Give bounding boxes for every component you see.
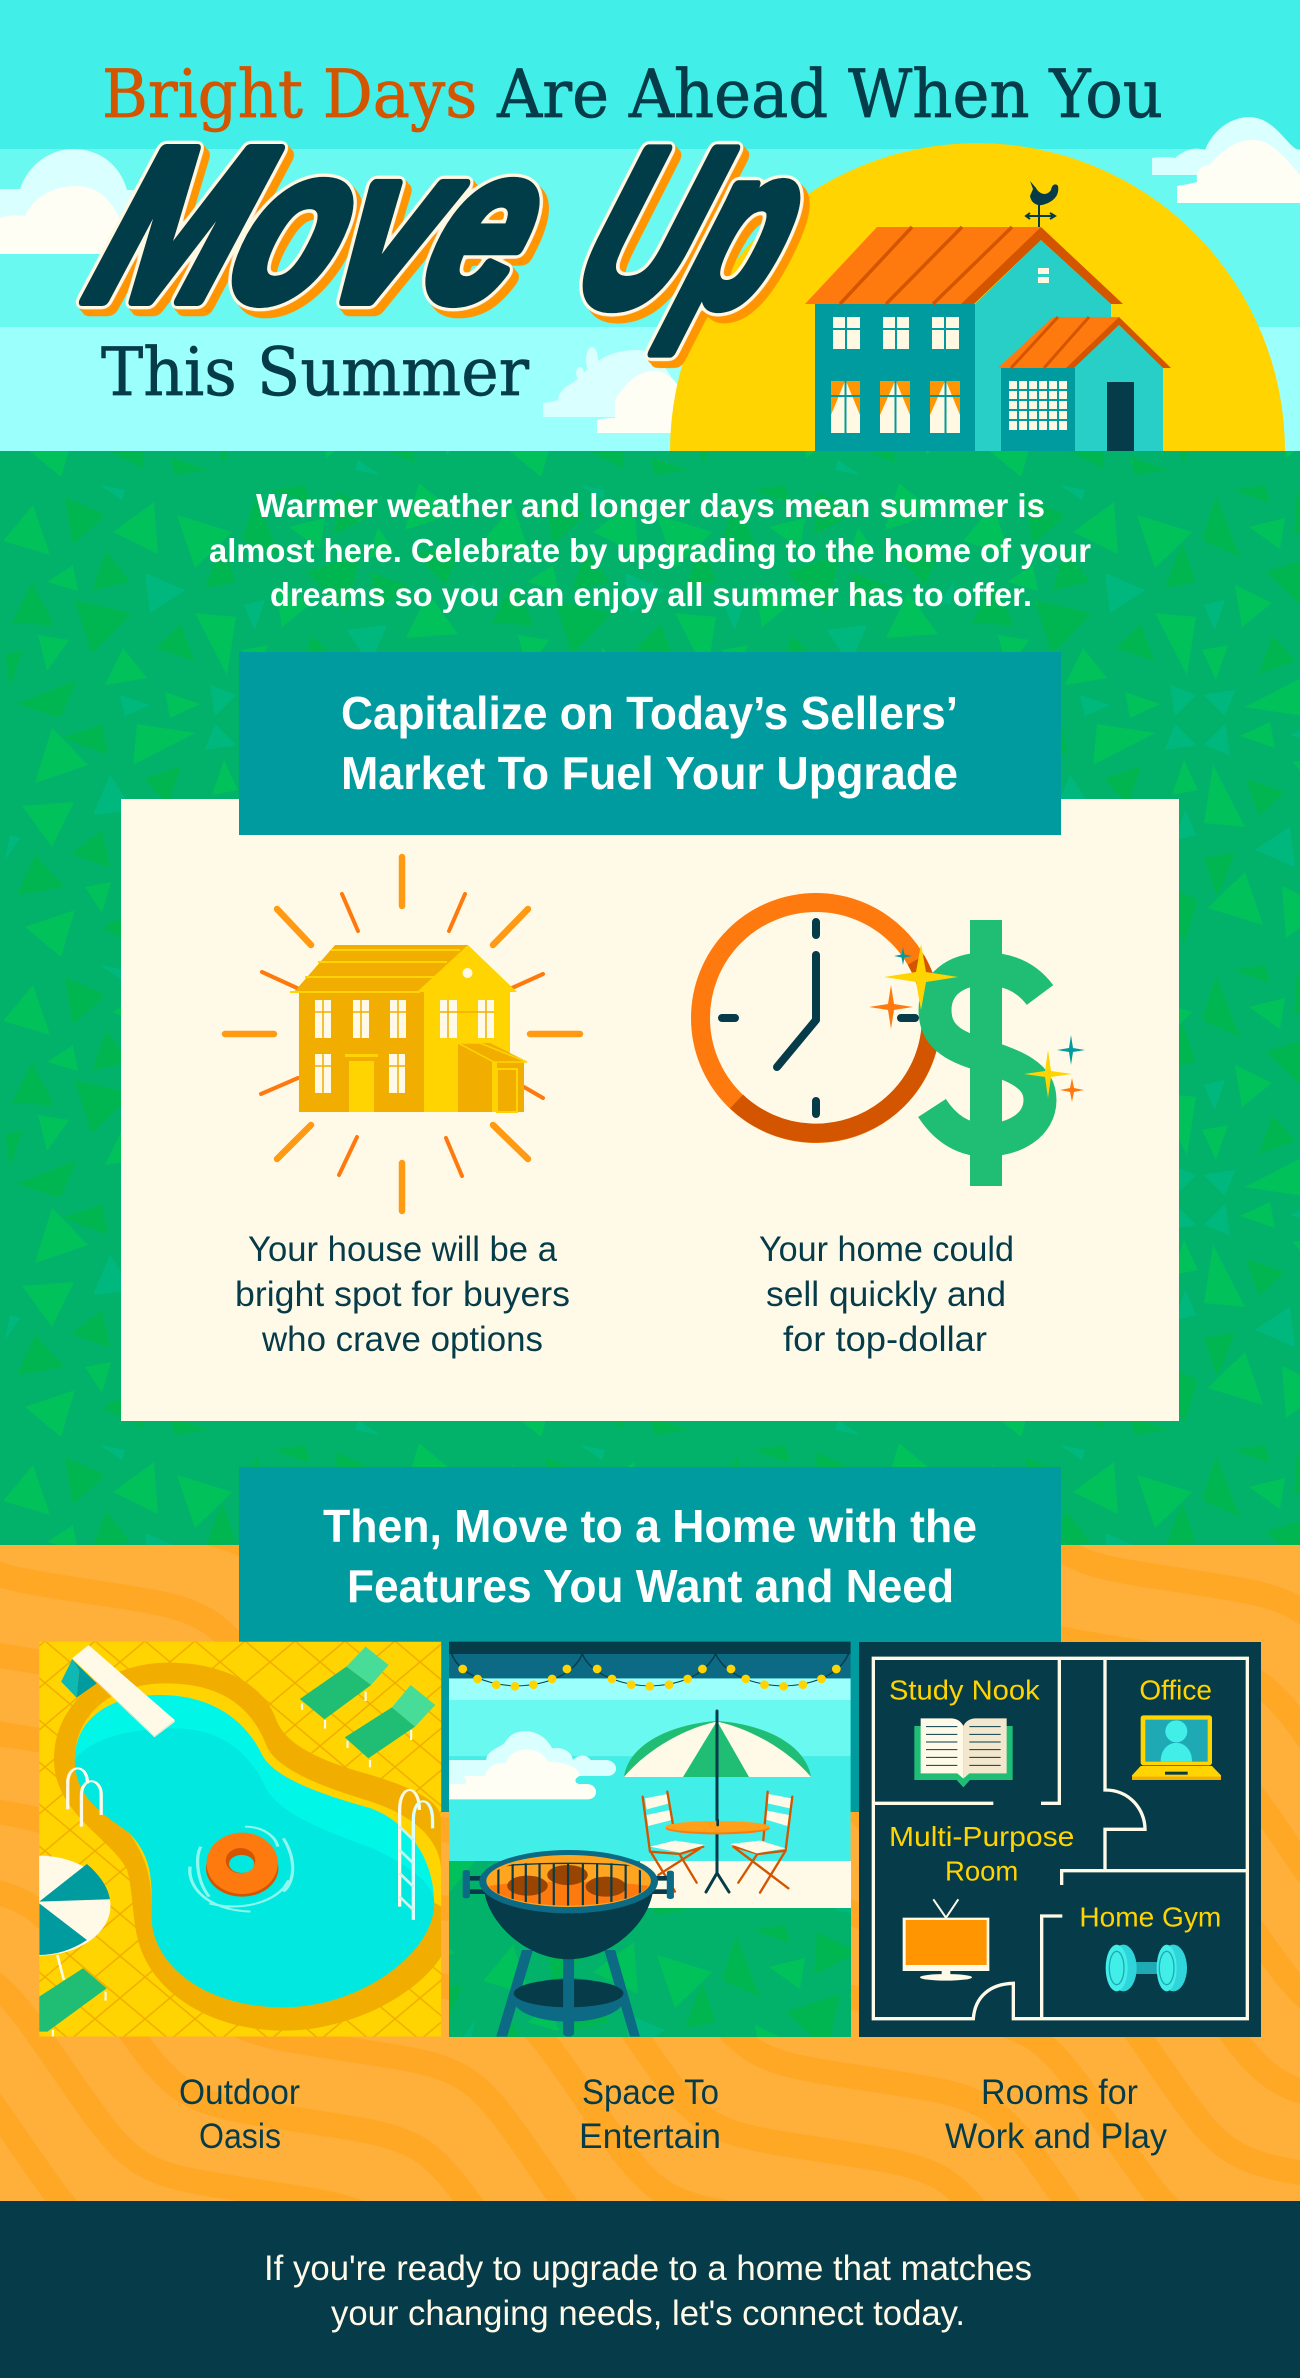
icon: cloud top right (1152, 117, 1300, 203)
icon: sun (670, 143, 1285, 451)
icon: tv (903, 1899, 989, 1981)
icon: glowing house (225, 857, 580, 1211)
lower windows (831, 381, 960, 433)
string lights (452, 1654, 848, 1691)
panel: footer: If you're ready to upgrade to a home that matches (264, 2249, 1032, 2288)
pool inner rim (75, 1683, 441, 1920)
pool float (190, 1827, 293, 1912)
panel: header sky (0, 0, 1300, 451)
label: home gym: Home Gym (1079, 1902, 1221, 1933)
icon: dumbbell (1106, 1945, 1187, 1991)
caption: sell quickly (759, 1230, 1014, 1359)
upper windows (833, 317, 959, 349)
intro text (209, 487, 1091, 613)
caption: outdoor oasis: Oasis (199, 2117, 281, 2156)
caption: outdoor oasis (179, 2073, 300, 2156)
walls (873, 1658, 1247, 2019)
captions: features (179, 2073, 1167, 2156)
title: Move Up: Up (547, 102, 842, 353)
caption: sell quickly: Your home could (759, 1230, 1014, 1269)
icon: wing (998, 317, 1171, 451)
caption: bright spot: who crave options (261, 1320, 543, 1359)
intro text: dreams so you can enjoy all summer has to offer. (270, 576, 1032, 613)
sky and awning (449, 1642, 851, 1863)
pool water (75, 1695, 434, 2007)
intro text: almost here. Celebrate by upgrading to the home of your (209, 532, 1091, 569)
patio umbrella (624, 1711, 811, 1892)
heading box: features: Features You Want and Need (347, 1560, 954, 1612)
panel: footer (0, 2201, 1300, 2378)
panel: sellers market card (121, 652, 1179, 1421)
icon: house with weathervane (805, 181, 1171, 451)
chair seats (650, 1841, 786, 1853)
caption: bright spot: bright spot for buyers (235, 1275, 570, 1314)
diving board (61, 1645, 175, 1737)
icon: cloud center (543, 347, 700, 433)
heading box: features: Then, Move to a Home with the (323, 1500, 977, 1552)
icon: cloud left (0, 149, 137, 254)
label: office: Office (1139, 1674, 1212, 1705)
label: multi-purpose room (889, 1821, 1074, 1887)
pool coping (54, 1663, 441, 2031)
caption: bright spot (235, 1230, 570, 1359)
panel: floor plan (859, 1642, 1261, 2037)
title line 3: This Summer (101, 334, 529, 411)
caption: space to entertain: Entertain (579, 2117, 721, 2156)
patio (640, 1861, 851, 1908)
panel: green lawn background (0, 451, 1300, 1545)
caption: space to entertain (579, 2073, 721, 2156)
beach umbrella (39, 1856, 110, 1980)
patio furniture (624, 1711, 811, 1893)
title line 1: Bright Days Are Ahead When You (102, 56, 1163, 133)
sparkles (869, 944, 1085, 1102)
loungers (39, 1647, 435, 2037)
title: Move Up: Move (63, 103, 582, 346)
panel: entertaining illustration (449, 1642, 851, 2037)
grill (463, 1850, 674, 2037)
panel: pool illustration (0, 1642, 441, 2037)
caption: outdoor oasis: Outdoor (179, 2073, 300, 2112)
icon: clock and dollar (700, 902, 1085, 1186)
caption: sell quickly: for top-dollar (783, 1320, 987, 1359)
icon: book (914, 1718, 1013, 1787)
pool ladders (68, 1768, 433, 1920)
panel: footer: your changing needs, let's connect today. (331, 2294, 965, 2333)
cloud (449, 1731, 616, 1799)
caption: bright spot: Your house will be a (248, 1230, 558, 1269)
table (666, 1820, 770, 1834)
caption: space to entertain: Space To (582, 2073, 719, 2112)
label: study nook: Study Nook (889, 1674, 1041, 1705)
intro text: Warmer weather and longer days mean summer is (256, 487, 1045, 524)
icon: laptop (1132, 1715, 1221, 1780)
awning (449, 1642, 851, 1678)
label: multi-purpose room: Multi-Purpose (889, 1821, 1074, 1852)
heading box: capitalize: Market To Fuel Your Upgrade (341, 747, 958, 799)
panel: orange patio background (0, 1545, 1300, 2201)
heading box: capitalize: Capitalize on Today’s Sellers’ (341, 687, 958, 739)
heading box: capitalize (239, 652, 1061, 835)
icon: dollar sign (932, 920, 1040, 1186)
caption: sell quickly: sell quickly and (766, 1275, 1006, 1314)
title (63, 56, 1163, 411)
label: multi-purpose room: Room (945, 1856, 1018, 1887)
caption: rooms for work and play: Rooms for (981, 2073, 1138, 2112)
caption: rooms for work and play (945, 2073, 1167, 2156)
lawn (449, 1861, 851, 2037)
icon: weathervane (1026, 181, 1058, 228)
chair frames (643, 1792, 792, 1893)
heading box: features (239, 1467, 1061, 1812)
caption: rooms for work and play: Work and Play (945, 2117, 1167, 2156)
chair slats (645, 1794, 792, 1826)
